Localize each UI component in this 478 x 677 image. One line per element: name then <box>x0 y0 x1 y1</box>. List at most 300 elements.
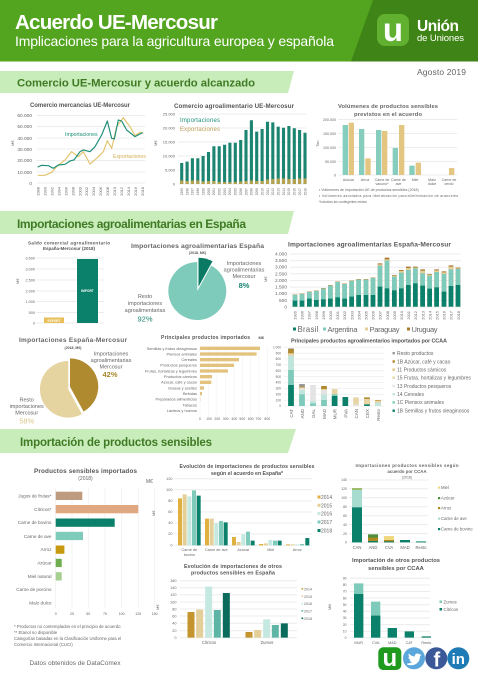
stacked bar chart: principales productos por CCAA: 700 <box>276 363 281 367</box>
bar chart: comercio agroalimentario: 2003 <box>223 188 227 195</box>
bar chart: productos sensibles importados: 150 <box>152 612 158 616</box>
stacked bar chart: productos sensibles por CCAA: 80 <box>343 505 347 509</box>
section heading: comercio: Comercio UE-Mercosur y acuerdo alcanzado <box>17 78 255 90</box>
grouped bar chart: evolución otros productos: productos sensibles en España <box>191 570 275 576</box>
header banner <box>0 0 478 62</box>
bar chart: principales productos importados: Productos pesqueros <box>160 363 197 368</box>
stacked bar chart: otros productos por CCAA: 70 <box>343 590 347 594</box>
grouped bar chart: evolución otros productos: 160 <box>170 579 176 583</box>
icon: Unión de Uniones <box>378 645 401 672</box>
icon: facebook: f <box>433 650 440 672</box>
title: Acuerdo UE-Mercosur <box>15 11 218 34</box>
bar chart: volúmenes de productos sensibles: Azúcar <box>343 178 355 182</box>
grouped bar chart: evolución otros productos: 60 <box>172 614 176 618</box>
stacked bar chart: importaciones España-Mercosur: 500 <box>279 298 287 304</box>
grouped bar chart: evolución productos sensibles: 2016 <box>321 512 332 518</box>
stacked bar chart: otros productos por CCAA: 90 <box>343 576 347 580</box>
bar chart: volúmenes de productos sensibles: Miel <box>412 178 418 182</box>
stacked bar chart: importaciones España-Mercosur: 2006 <box>371 310 376 320</box>
line chart: comercio mercancías: M€ <box>10 140 15 146</box>
stacked bar chart: importaciones España-Mercosur: 2013 <box>420 310 425 320</box>
bar chart: saldo comercial: 500 <box>29 311 35 315</box>
pie chart: importaciones España-Mercosur: Importaciones <box>94 352 129 358</box>
grouped bar chart: evolución productos sensibles: 0 <box>170 544 172 548</box>
bar chart: productos sensibles importados: Miel natural <box>28 574 52 579</box>
bar chart: comercio agroalimentario: 5.000 <box>165 168 176 172</box>
line chart: comercio mercancías: 10.000 <box>17 170 32 176</box>
stacked bar chart: principales productos por CCAA: 1B Semillas y frutos oleaginosos <box>397 408 470 414</box>
stacked bar chart: principales productos por CCAA: Resto productos <box>397 351 434 357</box>
grouped bar chart: evolución otros productos: 20 <box>172 629 176 633</box>
bar chart: productos sensibles importados <box>16 468 158 616</box>
bar chart: productos sensibles importados: Jugos de frutas* <box>18 494 52 498</box>
bar chart: comercio agroalimentario: 1995 <box>180 188 184 195</box>
pie chart: importaciones agroalimentarias España: agroalimentarias <box>224 268 265 274</box>
stacked bar chart: importaciones España-Mercosur: 0 <box>284 304 287 310</box>
grouped bar chart: evolución productos sensibles: 100 <box>166 488 172 492</box>
stacked bar chart: otros productos por CCAA: sensibles por CCAA <box>368 566 425 572</box>
bar chart: principales productos importados: 400 <box>231 417 237 421</box>
stacked bar chart: principales productos por CCAA: GAL <box>311 409 316 418</box>
line chart: comercio mercancías: 1988 <box>36 186 40 196</box>
stacked bar chart: importaciones España-Mercosur: 2014 <box>427 310 432 320</box>
grouped bar chart: evolución otros productos: 120 <box>170 593 176 597</box>
line chart: comercio mercancías: 0 <box>29 181 32 187</box>
stacked bar chart: principales productos por CCAA: 1.000 <box>273 346 281 350</box>
grouped bar chart: evolución productos sensibles: Arroz <box>293 548 302 552</box>
stacked bar chart: otros productos por CCAA: Resto <box>421 641 431 645</box>
stacked bar chart: otros productos por CCAA: Zumos <box>444 599 457 604</box>
grouped bar chart: evolución productos sensibles: bovino <box>184 553 195 557</box>
pie chart: importaciones agroalimentarias España: Importaciones agroalimentarias España <box>131 243 264 250</box>
bar chart: productos sensibles importados: Azúcar <box>37 560 52 566</box>
bar chart: saldo comercial: 3.500 <box>25 256 35 260</box>
grouped bar chart: evolución productos sensibles: Azúcar <box>237 548 250 552</box>
bar chart: comercio agroalimentario: 2006 <box>239 188 243 195</box>
stacked bar chart: productos sensibles por CCAA: (2018) <box>402 476 412 480</box>
bar chart: comercio agroalimentario: 2014 <box>282 188 286 195</box>
stacked bar chart: importaciones España-Mercosur: Uruguay <box>412 325 438 334</box>
line chart: comercio mercancías: 2000 <box>77 186 82 196</box>
stacked bar chart: importaciones España-Mercosur: 1997 <box>307 310 312 320</box>
pie chart: importaciones España-Mercosur: (2018, M€) <box>65 346 81 350</box>
stacked bar chart: importaciones España-Mercosur: 2015 <box>434 310 440 320</box>
bar chart: productos sensibles importados: Carne de bovino <box>18 520 52 525</box>
pie chart: importaciones agroalimentarias España: Importaciones <box>227 261 262 267</box>
grouped bar chart: evolución productos sensibles: 120 <box>166 477 172 481</box>
stacked bar chart: principales productos por CCAA: AND <box>300 408 305 419</box>
stacked bar chart: principales productos por CCAA <box>273 338 471 421</box>
stacked bar chart: productos sensibles por CCAA: Carne de bovino <box>441 526 473 532</box>
grouped bar chart: evolución otros productos: 100 <box>170 600 176 604</box>
notes: * Productos no contemplados en el principio de acuerdo <box>14 624 121 629</box>
stacked bar chart: principales productos por CCAA: 100 <box>276 398 281 402</box>
pie chart: importaciones España-Mercosur: Importaciones España-Mercosur <box>19 337 127 344</box>
stacked bar chart: importaciones España-Mercosur: Argentina <box>328 325 358 334</box>
icon: linkedin: in <box>452 651 465 668</box>
bar chart: volúmenes de productos sensibles: dulce <box>428 182 436 186</box>
stacked bar chart: productos sensibles por CCAA: 0 <box>345 540 347 544</box>
bar chart: principales productos importados: 500 <box>239 417 245 421</box>
bar chart: volúmenes de productos sensibles: 50.000 <box>325 160 336 164</box>
bar chart: comercio agroalimentario: 2016 <box>293 188 297 195</box>
grouped bar chart: evolución productos sensibles: 2018 <box>321 529 332 535</box>
bar chart: productos sensibles importados: Carne de ave <box>24 534 52 539</box>
stacked bar chart: productos sensibles por CCAA: 100 <box>341 496 347 500</box>
grouped bar chart: evolución otros productos: Cítricos <box>202 640 216 645</box>
stacked bar chart: principales productos por CCAA: Resto <box>376 409 381 421</box>
stacked bar chart: principales productos por CCAA: Principales productos agroalimentarios importados por CCAA <box>291 338 447 344</box>
bar chart: comercio agroalimentario: 2002 <box>218 188 222 195</box>
bar chart: volúmenes de productos sensibles: Volúmenes de productos sensibles <box>338 104 438 110</box>
bar chart: productos sensibles importados: 50 <box>86 612 90 616</box>
bar chart: comercio agroalimentario: 1997 <box>191 188 195 195</box>
bar chart: principales productos importados: 300 <box>223 417 229 421</box>
bar chart: comercio agroalimentario: 2008 <box>250 188 254 195</box>
bar chart: volúmenes de productos sensibles: ▪ Volúmenes de importación UE de productos sensibles (2018) <box>319 188 419 192</box>
stacked bar chart: principales productos por CCAA: MUR <box>333 408 338 419</box>
bar chart: comercio agroalimentario: 2005 <box>234 188 238 195</box>
line chart: comercio mercancías: 2016 <box>133 186 138 196</box>
bar chart: comercio agroalimentario: 2009 <box>255 188 259 195</box>
logo: Unión de Uniones: Unión <box>417 18 459 35</box>
stacked bar chart: importaciones España-Mercosur: 1996 <box>300 310 305 320</box>
bar chart: productos sensibles importados: 25 <box>70 612 74 616</box>
bar chart: volúmenes de productos sensibles: Carne de <box>375 178 389 182</box>
bar chart: principales productos importados: M€ <box>258 335 265 340</box>
stacked bar chart: productos sensibles por CCAA: 140 <box>341 478 347 482</box>
stacked bar chart: otros productos por CCAA: Cítricos <box>444 607 458 612</box>
grouped bar chart: evolución otros productos: 140 <box>170 586 176 590</box>
bar chart: comercio agroalimentario <box>153 103 307 195</box>
stacked bar chart: principales productos por CCAA: 1C Piensos animales <box>397 400 444 406</box>
line chart: comercio mercancías: 2012 <box>119 186 124 196</box>
stacked bar chart: otros productos por CCAA: 30 <box>343 616 347 620</box>
stacked bar chart: importaciones España-Mercosur: Paraguay <box>370 325 400 334</box>
line chart: comercio mercancías: Comercio mercancías UE-Mercosur <box>30 103 131 109</box>
stacked bar chart: productos sensibles por CCAA: MAD <box>400 545 410 550</box>
stacked bar chart: productos sensibles por CCAA: CVA <box>385 545 393 550</box>
bar chart: productos sensibles importados: 125 <box>135 612 141 616</box>
stacked bar chart: productos sensibles por CCAA: Importaciones productos sensibles según <box>356 463 459 468</box>
stacked bar chart: principales productos por CCAA: PVA <box>343 409 348 418</box>
bar chart: saldo comercial <box>15 240 110 326</box>
stacked bar chart: importaciones España-Mercosur: 2017 <box>449 310 454 320</box>
line chart: comercio mercancías: Exportaciones <box>113 154 146 160</box>
stacked bar chart: importaciones España-Mercosur: 2003 <box>349 310 354 320</box>
line chart: comercio mercancías: 2004 <box>91 186 96 196</box>
bar chart: productos sensibles importados: (2018) <box>78 476 93 482</box>
bar chart: saldo comercial: IMPORT <box>81 289 94 293</box>
stacked bar chart: importaciones España-Mercosur: 1999 <box>321 310 326 320</box>
grouped bar chart: evolución otros productos <box>155 564 312 645</box>
stacked bar chart: principales productos por CCAA: 600 <box>276 369 281 373</box>
line chart: comercio mercancías: 60.000 <box>17 113 32 119</box>
bar chart: principales productos importados: 700 <box>255 417 261 421</box>
bar chart: comercio agroalimentario: 20.000 <box>163 126 176 130</box>
grouped bar chart: evolución productos sensibles: 2015 <box>321 503 332 509</box>
bar chart: volúmenes de productos sensibles: Carne de <box>391 178 406 182</box>
bar chart: principales productos importados: Cereales <box>181 357 197 362</box>
pie chart: importaciones agroalimentarias España: Mercosur <box>233 274 256 280</box>
bar chart: principales productos importados: 800 <box>264 417 270 421</box>
grouped bar chart: evolución productos sensibles: Carne de ave <box>205 548 228 552</box>
icon: Unión de Uniones: u <box>382 645 397 672</box>
stacked bar chart: principales productos por CCAA: 13 Productos pesqueros <box>397 384 452 390</box>
stacked bar chart: otros productos por CCAA: Importación de otros productos <box>352 558 440 564</box>
pie chart: importaciones agroalimentarias España: Resto <box>138 294 152 300</box>
stacked bar chart: principales productos por CCAA: 11 Productos cárnicos <box>397 368 447 374</box>
stacked bar chart: otros productos por CCAA: 60 <box>343 596 347 600</box>
bar chart: principales productos importados: 200 <box>214 417 220 421</box>
pie chart: importaciones agroalimentarias España: (2018, M€) <box>189 251 206 255</box>
stacked bar chart: importaciones España-Mercosur: 1998 <box>314 310 319 320</box>
bar chart: comercio agroalimentario: 1998 <box>196 188 200 195</box>
stacked bar chart: productos sensibles por CCAA: 120 <box>341 487 347 491</box>
bar chart: volúmenes de productos sensibles: Ton <box>315 141 320 147</box>
stacked bar chart: productos sensibles por CCAA: 20 <box>343 532 347 536</box>
stacked bar chart: importaciones España-Mercosur: 2004 <box>356 310 361 320</box>
icon: facebook <box>425 647 447 672</box>
bar chart: comercio agroalimentario: 2010 <box>260 188 264 195</box>
pie chart: importaciones España-Mercosur: agroalimentarias <box>91 358 132 364</box>
line chart: comercio mercancías: 2002 <box>84 186 89 196</box>
line chart: comercio mercancías: 1994 <box>56 186 61 196</box>
stacked bar chart: importaciones España-Mercosur: Brasil <box>298 325 319 334</box>
bar chart: comercio agroalimentario: 2011 <box>266 188 270 195</box>
stacked bar chart: importaciones España-Mercosur: 2010 <box>399 310 404 320</box>
bar chart: principales productos importados: Lácteos y huevos <box>167 408 197 413</box>
stacked bar chart: productos sensibles por CCAA: 40 <box>343 523 347 527</box>
bar chart: principales productos importados: Tabacos <box>182 402 197 407</box>
bar chart: volúmenes de productos sensibles <box>315 104 458 204</box>
stacked bar chart: productos sensibles por CCAA: 60 <box>343 514 347 518</box>
grouped bar chart: evolución productos sensibles: 60 <box>168 510 172 514</box>
pie chart: importaciones España-Mercosur: 58% <box>19 416 35 426</box>
line chart: comercio mercancías: 2010 <box>112 186 117 196</box>
bar chart: productos sensibles importados: 0 <box>55 612 57 616</box>
line chart: comercio mercancías: 2018 <box>140 186 145 196</box>
stacked bar chart: productos sensibles por CCAA: Miel <box>441 485 449 490</box>
stacked bar chart: productos sensibles por CCAA: Carne de ave <box>441 516 467 521</box>
grouped bar chart: evolución otros productos: 2016 <box>304 602 312 606</box>
bar chart: volúmenes de productos sensibles: ave <box>396 182 401 186</box>
bar chart: productos sensibles importados: Cítricos* <box>34 507 52 512</box>
bar chart: volúmenes de productos sensibles: Carne de <box>442 178 456 182</box>
bar chart: comercio agroalimentario: 10.000 <box>163 154 176 158</box>
bar chart: comercio agroalimentario: 2017 <box>298 188 302 195</box>
bar chart: comercio agroalimentario: 2004 <box>228 188 232 195</box>
grouped bar chart: evolución otros productos: 0 <box>174 636 176 640</box>
stacked bar chart: principales productos por CCAA: 14 Cereales <box>397 392 424 398</box>
bar chart: principales productos importados: Grasas y aceites <box>168 385 197 390</box>
bar chart: volúmenes de productos sensibles: 0 <box>334 174 336 178</box>
stacked bar chart: importaciones España-Mercosur: 1.500 <box>275 285 287 291</box>
stacked bar chart: principales productos por CCAA: MAD <box>322 408 327 419</box>
stacked bar chart: principales productos por CCAA: 300 <box>276 387 281 391</box>
bar chart: comercio agroalimentario: 2012 <box>271 188 275 195</box>
line chart: comercio mercancías: 1992 <box>49 186 54 196</box>
stacked bar chart: importaciones España-Mercosur: Importaciones agroalimentarias España-Mercosur <box>288 242 451 248</box>
line chart: comercio mercancías: 2006 <box>98 186 103 196</box>
grouped bar chart: evolución productos sensibles: según el acuerdo en España* <box>211 471 284 477</box>
grouped bar chart: evolución otros productos: Evolución de importaciones de otros <box>184 564 282 570</box>
grouped bar chart: evolución productos sensibles: 20 <box>168 532 172 536</box>
bar chart: principales productos importados: Frutas, hortalizas y legumbres <box>145 368 197 373</box>
stacked bar chart: principales productos por CCAA: 900 <box>276 351 281 355</box>
bar chart: comercio agroalimentario: 2000 <box>207 188 211 195</box>
pie chart: importaciones agroalimentarias España <box>125 243 265 324</box>
pie chart: importaciones España-Mercosur <box>10 337 132 426</box>
section heading: importaciones agroalimentarias: Importaciones agroalimentarias en España <box>17 217 246 231</box>
section heading: comercio <box>0 71 294 93</box>
bar chart: saldo comercial: 2.500 <box>25 278 35 282</box>
bar chart: volúmenes de productos sensibles: *Incluidos los contingentes mixtos <box>319 200 367 204</box>
icon: twitter <box>403 647 425 669</box>
bar chart: volúmenes de productos sensibles: ▪ Volúmenes asociados para liberalización parcial/eliminación de aranceles <box>319 194 458 198</box>
stacked bar chart: principales productos por CCAA: 0 <box>279 404 281 408</box>
stacked bar chart: importaciones España-Mercosur: 3.000 <box>275 265 287 271</box>
source: Datos obtenidos de DataComex <box>30 660 121 667</box>
bar chart: principales productos importados: Azúcar, café y cacao <box>161 380 197 385</box>
stacked bar chart: otros productos por CCAA: MUR <box>354 641 363 645</box>
stacked bar chart: importaciones España-Mercosur: 2001 <box>335 310 340 320</box>
stacked bar chart: otros productos por CCAA: 40 <box>343 610 347 614</box>
stacked bar chart: importaciones España-Mercosur <box>263 242 461 334</box>
bar chart: saldo comercial: M€ <box>15 278 20 284</box>
bar chart: principales productos importados: Bebidas <box>183 391 197 396</box>
stacked bar chart: importaciones España-Mercosur: 2002 <box>342 310 347 320</box>
stacked bar chart: productos sensibles por CCAA: Azúcar <box>441 496 455 500</box>
bar chart: comercio agroalimentario: 1999 <box>201 188 205 195</box>
stacked bar chart: otros productos por CCAA: 20 <box>343 623 347 627</box>
bar chart: volúmenes de productos sensibles: 150.000 <box>323 132 336 136</box>
stacked bar chart: productos sensibles por CCAA: acuerdo por CCAA <box>387 469 427 474</box>
stacked bar chart: productos sensibles por CCAA: Arroz <box>441 506 451 510</box>
pie chart: importaciones agroalimentarias España: importaciones <box>128 301 162 307</box>
bar chart: comercio agroalimentario: Comercio agroalimentario UE-Mercosur <box>174 103 295 110</box>
stacked bar chart: principales productos por CCAA: 1B Azúcar, café y cacao <box>397 359 451 365</box>
pie chart: importaciones agroalimentarias España: agroalimentarias <box>125 308 166 314</box>
pie chart: importaciones España-Mercosur: Resto <box>20 398 34 404</box>
stacked bar chart: productos sensibles por CCAA: Resto <box>416 545 427 550</box>
bar chart: volúmenes de productos sensibles: Maíz <box>428 178 436 182</box>
pie chart: importaciones agroalimentarias España: 92% <box>137 314 153 324</box>
pie chart: importaciones España-Mercosur: Mercosur <box>100 364 123 370</box>
stacked bar chart: otros productos por CCAA: 80 <box>343 583 347 587</box>
bar chart: saldo comercial: EXPORT <box>47 319 61 323</box>
stacked bar chart: importaciones España-Mercosur: 2011 <box>406 310 411 320</box>
grouped bar chart: evolución otros productos: 2014 <box>304 588 312 592</box>
bar chart: productos sensibles importados: Productos sensibles importados <box>34 468 137 475</box>
bar chart: comercio agroalimentario: M€ <box>153 140 158 146</box>
bar chart: principales productos importados: Piensos animales <box>166 351 197 356</box>
stacked bar chart: importaciones España-Mercosur: 2.000 <box>275 278 287 284</box>
notes: Categorías basadas en la Clasificación Uniforme para el <box>14 636 121 641</box>
line chart: comercio mercancías: 1990 <box>42 186 48 196</box>
stacked bar chart: principales productos por CCAA: CAT <box>289 409 294 418</box>
bar chart: principales productos importados: Preparados alimenticios <box>155 397 197 402</box>
bar chart: principales productos importados: Productos cárnicos <box>164 374 197 379</box>
grouped bar chart: evolución productos sensibles <box>151 464 332 557</box>
grouped bar chart: evolución otros productos: 2018 <box>304 617 312 621</box>
stacked bar chart: importaciones España-Mercosur: 3.500 <box>275 258 287 264</box>
bar chart: comercio agroalimentario: Exportaciones <box>180 127 220 133</box>
section heading: productos sensibles: Importación de productos sensibles <box>20 437 212 449</box>
bar chart: comercio agroalimentario: Importaciones <box>180 118 220 124</box>
bar chart: saldo comercial: 0 <box>33 322 35 326</box>
stacked bar chart: otros productos por CCAA: 10 <box>343 630 347 634</box>
bar chart: productos sensibles importados: Arroz <box>41 547 52 552</box>
bar chart: volúmenes de productos sensibles: cerdo <box>444 182 454 186</box>
bar chart: comercio agroalimentario: 2013 <box>276 188 280 195</box>
bar chart: comercio agroalimentario: 2001 <box>212 188 216 195</box>
bar chart: productos sensibles importados: Carne de porcino <box>16 587 52 592</box>
date: Agosto 2019 <box>417 67 466 77</box>
bar chart: principales productos importados: 600 <box>248 417 254 421</box>
stacked bar chart: otros productos por CCAA: CVA <box>372 641 380 645</box>
bar chart: saldo comercial: 3.000 <box>25 268 35 272</box>
stacked bar chart: importaciones España-Mercosur: 1.000 <box>275 291 287 297</box>
bar chart: principales productos importados: Principales productos importados <box>161 335 250 341</box>
bar chart: principales productos importados: Semillas y frutos oleaginosos <box>147 346 197 351</box>
logo: Unión de Uniones: de Uniones <box>417 33 464 44</box>
line chart: comercio mercancías: 1996 <box>63 186 68 196</box>
bar chart: productos sensibles importados: M€ <box>146 479 153 485</box>
stacked bar chart: principales productos por CCAA: 500 <box>276 375 281 379</box>
icon: linkedin <box>447 647 469 669</box>
grouped bar chart: evolución otros productos: M€ <box>155 604 160 610</box>
bar chart: comercio agroalimentario: 1996 <box>185 188 189 195</box>
logo: Unión de Uniones <box>377 11 464 48</box>
stacked bar chart: principales productos por CCAA: CAN <box>354 409 359 419</box>
stacked bar chart: otros productos por CCAA: 0 <box>345 636 347 640</box>
grouped bar chart: evolución otros productos: Zumos <box>261 640 273 645</box>
stacked bar chart: importaciones España-Mercosur: 2007 <box>378 310 383 320</box>
grouped bar chart: evolución otros productos: 2015 <box>304 595 312 599</box>
bar chart: comercio agroalimentario: 2018 <box>303 188 307 195</box>
grouped bar chart: evolución otros productos: 2017 <box>304 610 312 614</box>
bar chart: comercio agroalimentario: 25.000 <box>163 112 176 116</box>
line chart: comercio mercancías: 40.000 <box>17 136 32 142</box>
bar chart: principales productos importados <box>145 335 270 421</box>
bar chart: volúmenes de productos sensibles: Arroz <box>361 178 369 182</box>
bar chart: volúmenes de productos sensibles: previstos en el acuerdo <box>354 112 422 118</box>
bar chart: saldo comercial: 2.000 <box>25 290 35 294</box>
stacked bar chart: otros productos por CCAA: CAT <box>406 641 414 645</box>
stacked bar chart: principales productos por CCAA: CEX <box>365 409 370 418</box>
logo: Unión de Uniones: u <box>383 11 403 48</box>
stacked bar chart: productos sensibles por CCAA <box>341 463 473 550</box>
notes: ** Etanol no disponible <box>14 630 58 635</box>
bar chart: volúmenes de productos sensibles: 200.000 <box>323 118 336 122</box>
bar chart: comercio agroalimentario: 2007 <box>244 188 248 195</box>
notes: Comercio Internacional (CUCI) <box>14 642 73 647</box>
stacked bar chart: importaciones España-Mercosur: 2009 <box>392 310 397 320</box>
stacked bar chart: otros productos por CCAA: Mill <box>327 604 332 610</box>
stacked bar chart: principales productos por CCAA: 800 <box>276 357 281 361</box>
grouped bar chart: evolución productos sensibles: Miel <box>267 548 274 552</box>
grouped bar chart: evolución productos sensibles: 40 <box>168 521 172 525</box>
line chart: comercio mercancías <box>10 103 146 196</box>
grouped bar chart: evolución otros productos: 80 <box>172 607 176 611</box>
subtitle: Implicaciones para la agricultura europea y española <box>15 33 334 49</box>
pie chart: importaciones España-Mercosur: 42% <box>102 370 118 379</box>
stacked bar chart: importaciones España-Mercosur: 2012 <box>413 310 418 320</box>
stacked bar chart: importaciones España-Mercosur: 1995 <box>292 310 298 320</box>
grouped bar chart: evolución otros productos: 40 <box>172 622 176 626</box>
grouped bar chart: evolución productos sensibles: Evolución de importaciones de productos sensibles <box>180 464 315 470</box>
